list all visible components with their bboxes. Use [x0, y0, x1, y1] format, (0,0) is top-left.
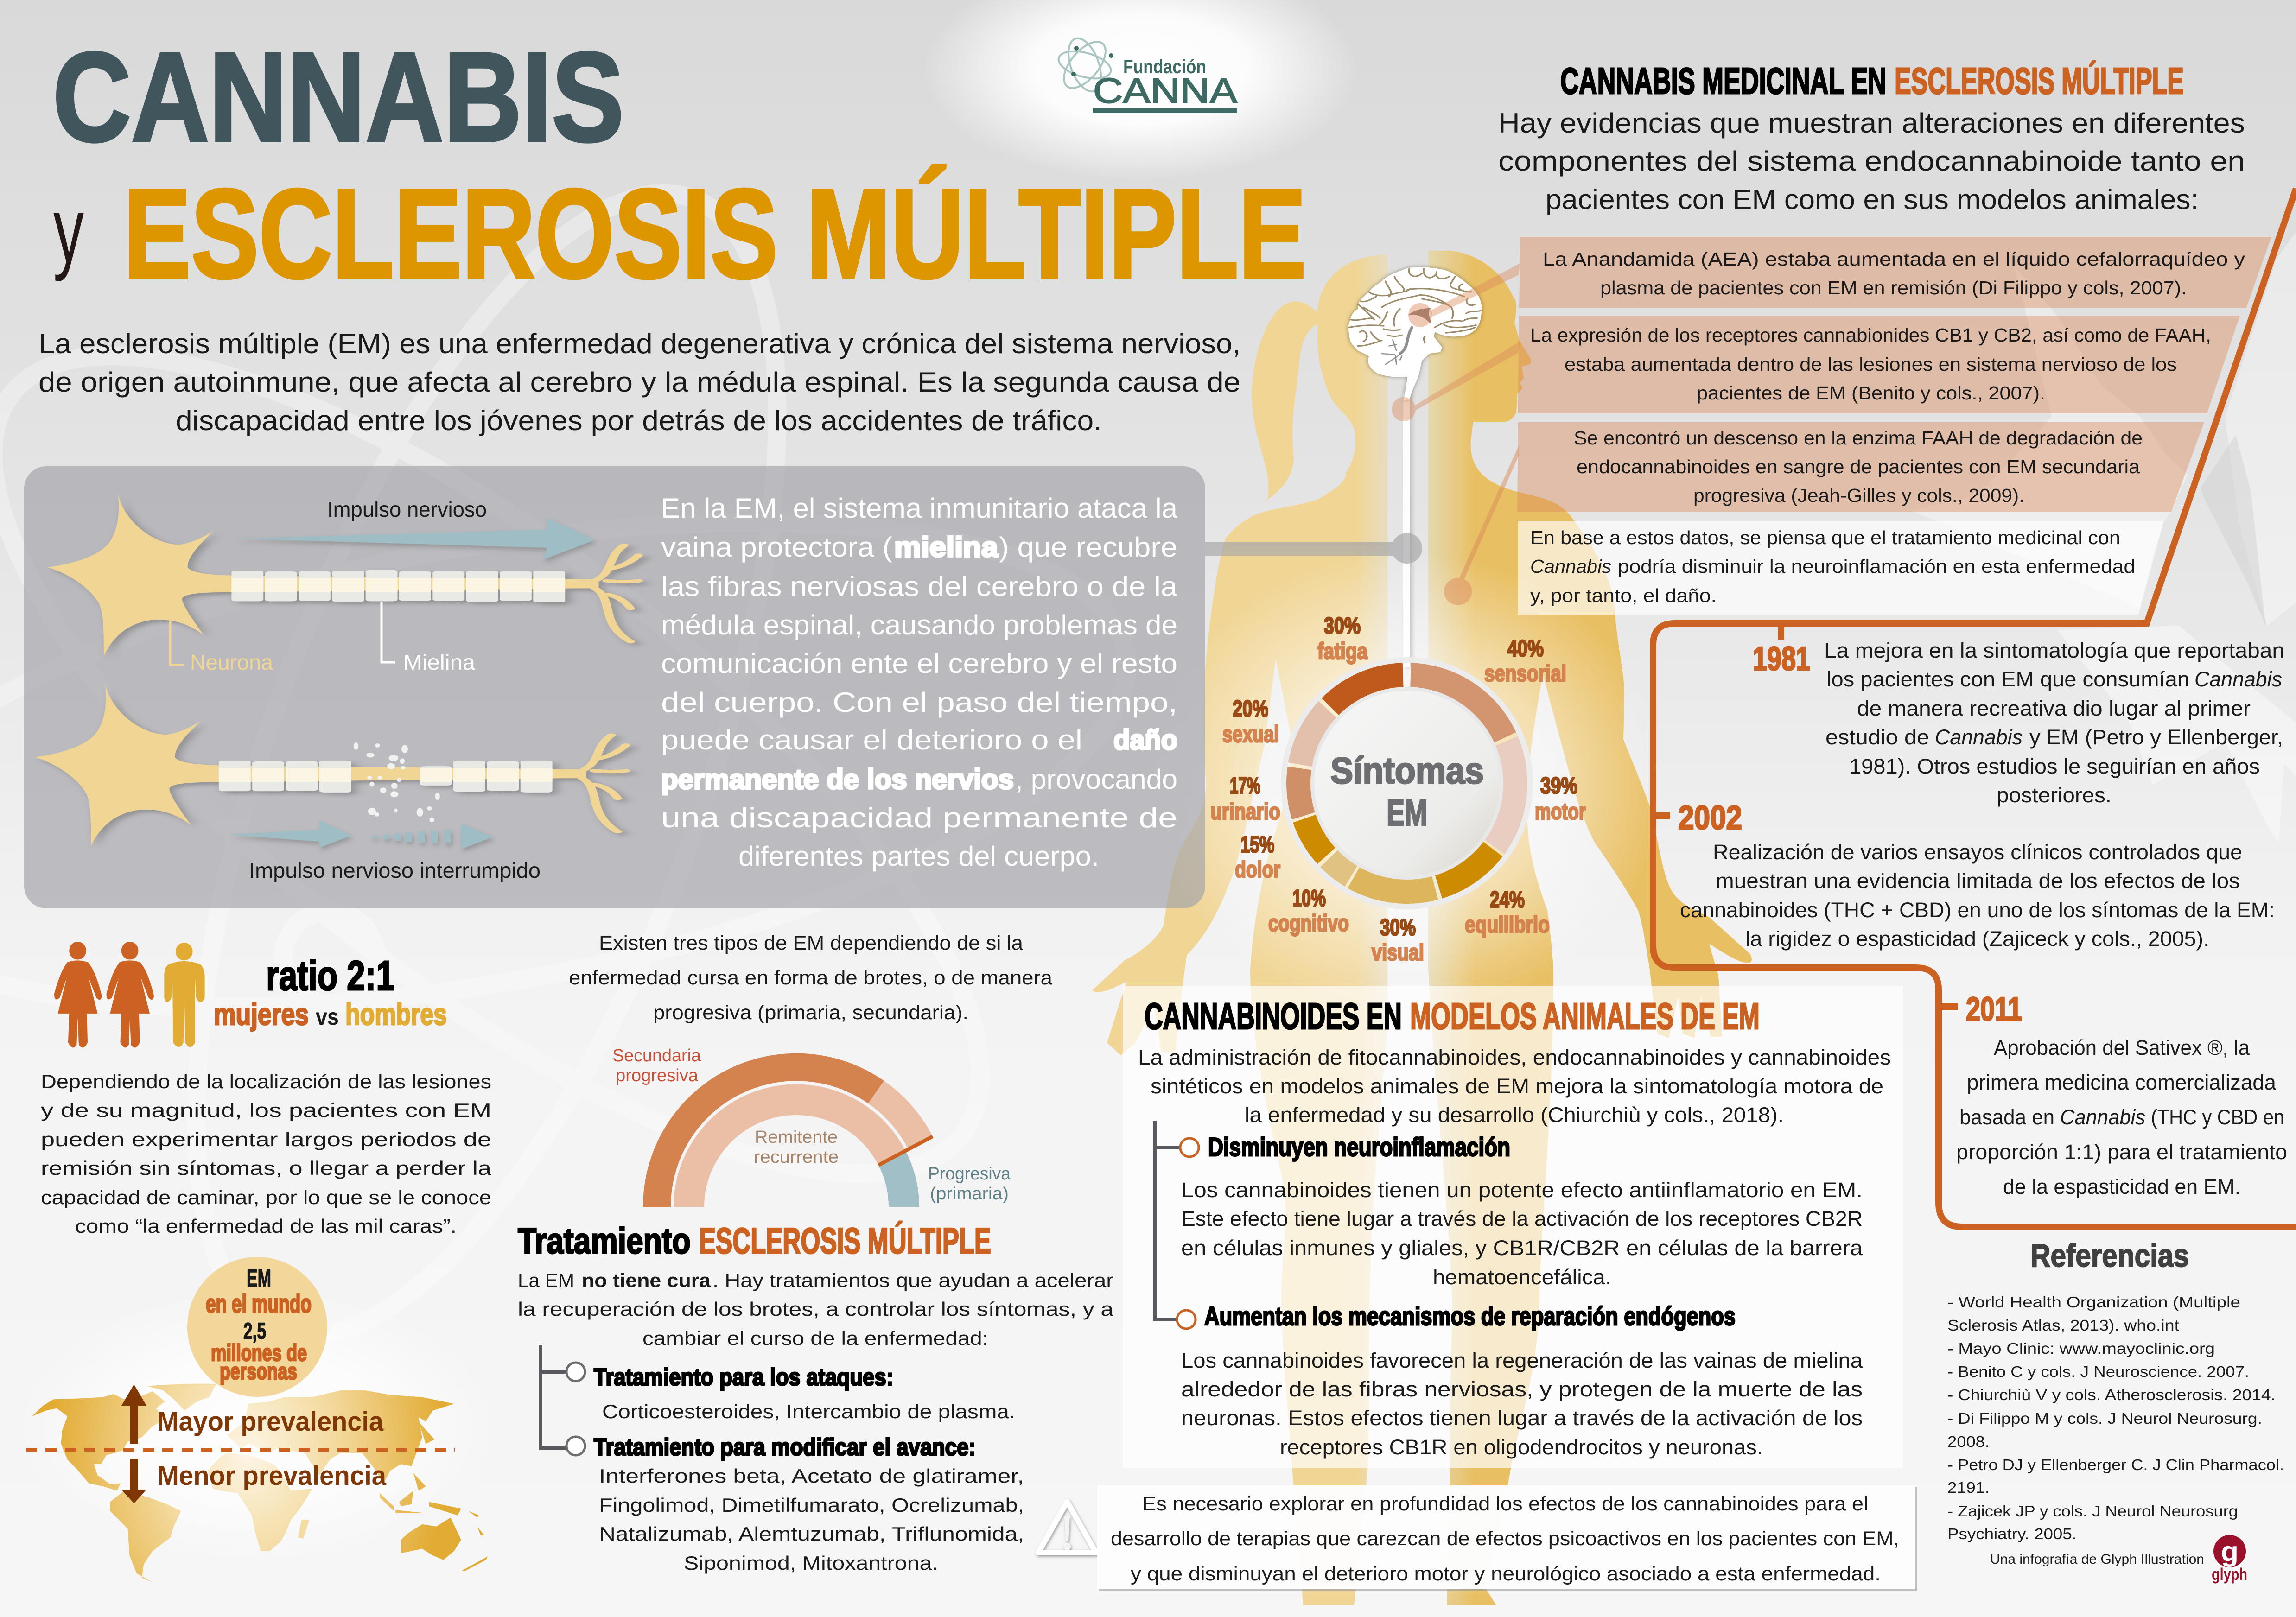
- text: evidence intro: componentes del sistema endocannabinoide tanto en: [1498, 146, 2245, 177]
- text: treatment intro: . Hay tratamientos que ayudan a acelerar: [712, 1269, 1113, 1291]
- logo: Fundación CANNA: [1056, 34, 1237, 113]
- chart: MS types arcs: Secundaria: [612, 1046, 701, 1065]
- callout: further research: y que disminuyan el deterioro motor y neurológico asociado a esta enfermedad.: [1131, 1563, 1881, 1585]
- panel: gray myelin explanation: [24, 466, 1422, 908]
- timeline: 2002: muestran una evidencia limitada de los efectos de los: [1716, 869, 2240, 893]
- circle: EM en el mundo: EM: [247, 1264, 271, 1292]
- heading: ratio 2:1: vs: [316, 1004, 339, 1030]
- text: myelin explanation: puede causar el deterioro o el: [661, 724, 1082, 755]
- heading: ratio 2:1: mujeres: [214, 997, 309, 1031]
- animal models list: neuronas. Estos efectos tienen lugar a través de la activación de los: [1181, 1406, 1863, 1430]
- text: relapses: como “la enfermedad de las mil caras”.: [75, 1215, 457, 1237]
- label: neurona: Neurona: [190, 650, 273, 674]
- credit: Glyph Illustration: glyph: [2212, 1565, 2247, 1584]
- symptom labels: 15%: [1240, 831, 1274, 857]
- title: ESCLEROSIS MÚLTIPLE: [123, 163, 1306, 305]
- text: references: - Petro DJ y Ellenberger C. J Clin Pharmacol.: [1947, 1456, 2284, 1473]
- symptom labels: fatiga: [1317, 638, 1368, 664]
- credit: Glyph Illustration: Una infografía de Glyph Illustration: [1990, 1552, 2204, 1567]
- circle: EM en el mundo: 2,5: [243, 1318, 266, 1344]
- symptom labels: 40%: [1507, 635, 1544, 661]
- label: impulso interrumpido: Impulso nervioso interrumpido: [249, 858, 541, 882]
- map glow: [16, 1288, 498, 1566]
- timeline: 1981: Cannabis: [1935, 725, 2023, 749]
- spinal cord: [1403, 394, 1410, 667]
- text: treatment intro: cambiar el curso de la enfermedad:: [642, 1327, 988, 1349]
- text: types of MS: enfermedad cursa en forma de brotes, o de manera: [569, 967, 1052, 989]
- arrow: nerve impulse: [231, 518, 595, 560]
- text: evidence intro: Hay evidencias que muestran alteraciones en diferentes: [1498, 108, 2245, 139]
- treatment list: [541, 1345, 1024, 1574]
- text: relapses: y de su magnitud, los pacientes con EM: [41, 1099, 491, 1121]
- timeline: 1981: y EM (Petro y Ellenberger,: [2029, 725, 2283, 749]
- animal models list: [1155, 1121, 1863, 1459]
- symptom labels: cognitivo: [1268, 910, 1349, 936]
- heading: animal models: CANNABINOIDES EN: [1145, 996, 1402, 1037]
- text: animal models intro: la enfermedad y su desarrollo (Chiurchiù y cols., 2018).: [1245, 1103, 1784, 1127]
- timeline: 2011: Aprobación del Sativex ®, la: [1994, 1036, 2250, 1059]
- text: myelin explanation: ) que recubre: [999, 532, 1177, 563]
- chart: MS types arcs: Progresiva: [928, 1164, 1011, 1184]
- heading: references: Referencias: [2030, 1237, 2189, 1274]
- text: references: 2008.: [1947, 1433, 1990, 1450]
- credit: Glyph Illustration: g: [2221, 1536, 2239, 1567]
- heading: animal models: [1145, 996, 1760, 1037]
- text: references: - Zajicek JP y cols. J Neurol Neurosurg: [1947, 1503, 2238, 1520]
- text: myelin explanation: , provocando: [1015, 764, 1177, 795]
- timeline: 2011: Cannabis: [2060, 1105, 2145, 1129]
- chart: MS types arcs: [612, 1046, 1011, 1207]
- text: references: 2191.: [1947, 1479, 1990, 1496]
- text: animal models intro: [1138, 1046, 1891, 1127]
- animal models list: Los cannabinoides tienen un potente efecto antiinflamatorio en EM.: [1181, 1178, 1863, 1202]
- brain: [1348, 267, 1482, 400]
- text: treatment intro: La EM: [518, 1269, 574, 1291]
- callout: further research: Es necesario explorar en profundidad los efectos de los cannabinoides para el: [1142, 1493, 1868, 1515]
- connector: abdomen marker to third panel: [1444, 445, 1519, 605]
- panel: evidence 1: plasma de pacientes con EM en remisión (Di Filippo y cols, 2007).: [1600, 277, 2187, 298]
- timeline: 2011: primera medicina comercializada: [1967, 1071, 2277, 1094]
- panel: conclusion: [1518, 521, 2164, 615]
- text: relapses: remisión sin síntomas, o llegar a perder la: [41, 1157, 492, 1179]
- symptom labels: 30%: [1324, 613, 1361, 639]
- text: relapses: Dependiendo de la localización de las lesiones: [41, 1071, 491, 1092]
- arrow: interrupted impulse: [228, 820, 493, 849]
- world map: [32, 1384, 488, 1582]
- chart: MS types arcs: progresiva: [616, 1066, 699, 1085]
- logo glow: [922, 0, 1358, 181]
- panel: evidence 3: [1517, 422, 2204, 512]
- timeline: 2002: cannabinoides (THC + CBD) en uno de los síntomas de la EM:: [1680, 898, 2275, 922]
- symptom labels: sensorial: [1484, 660, 1566, 686]
- animal models list: Disminuyen neuroinflamación: [1208, 1132, 1510, 1161]
- symptom labels: 10%: [1292, 885, 1326, 911]
- text: myelin explanation: daño: [1113, 724, 1177, 755]
- timeline: 1981: Cannabis: [2194, 667, 2282, 691]
- text: types of MS: [569, 932, 1052, 1024]
- timeline: 2011: de la espasticidad en EM.: [2003, 1175, 2240, 1198]
- chart: MS types arcs: Remitente: [755, 1128, 838, 1147]
- body silhouette: [1092, 251, 1752, 1605]
- text: myelin explanation: médula espinal, causando problemas de: [661, 609, 1177, 640]
- label: neurona: [170, 620, 273, 674]
- text: treatment intro: no tiene cura: [582, 1269, 711, 1291]
- panel: evidence 2: estaba aumentada dentro de las lesiones en sistema nervioso de los: [1565, 354, 2177, 375]
- timeline: 1981: La mejora en la sintomatología que reportaban: [1824, 639, 2284, 662]
- treatment list: Natalizumab, Alemtuzumab, Triflunomida,: [599, 1523, 1024, 1545]
- figure: [1092, 251, 1752, 1605]
- symptom labels: 20%: [1233, 696, 1268, 722]
- label: impulso nervioso: Impulso nervioso: [327, 497, 487, 521]
- arrow: up: [121, 1384, 146, 1444]
- symptom labels: 24%: [1490, 887, 1525, 913]
- panel: evidence 2: La expresión de los receptores cannabionides CB1 y CB2, así como de FAAH,: [1530, 324, 2211, 346]
- panel: evidence 2: pacientes de EM (Benito y cols., 2007).: [1697, 382, 2045, 404]
- label: menor: Menor prevalencia: [157, 1461, 387, 1491]
- treatment list: Corticoesteroides, Intercambio de plasma.: [602, 1401, 1015, 1422]
- circle: EM en el mundo: [187, 1257, 327, 1397]
- animal models list: Los cannabinoides favorecen la regeneración de las vainas de mielina: [1181, 1349, 1863, 1372]
- heading: ratio 2:1: [214, 953, 447, 1031]
- connector: brain to first panel: [1429, 263, 1520, 317]
- symptom labels: dolor: [1235, 856, 1280, 882]
- title: y: [53, 178, 84, 282]
- timeline: 2011: proporción 1:1) para el tratamiento: [1956, 1140, 2287, 1164]
- symptom labels: [1210, 613, 1586, 965]
- panel: evidence 3: endocannabinoides en sangre de pacientes con EM secundaria: [1577, 456, 2140, 477]
- timeline: 1981: posteriores.: [1997, 783, 2112, 807]
- panel: conclusion: y, por tanto, el daño.: [1530, 585, 1717, 606]
- treatment list: Tratamiento para los ataques:: [594, 1364, 893, 1391]
- arrow: down: [121, 1459, 146, 1503]
- label: mayor: Mayor prevalencia: [157, 1407, 384, 1437]
- panel: evidence 3: Se encontró un descenso en la enzima FAAH de degradación de: [1574, 427, 2143, 449]
- chart: MS types arcs: (primaria): [930, 1184, 1009, 1204]
- diagram: damaged neuron: [35, 679, 626, 846]
- chart: MS types arcs: recurrente: [754, 1148, 839, 1167]
- treatment list: Fingolimod, Dimetilfumarato, Ocrelizumab,: [599, 1494, 1024, 1516]
- chart: symptoms ring: EM: [1387, 792, 1427, 833]
- text: references: Psychiatry. 2005.: [1947, 1525, 2077, 1542]
- decorative atom orbits: [0, 124, 1164, 1405]
- text: references: [1947, 1294, 2284, 1542]
- diagram: healthy neuron: [48, 489, 639, 656]
- heading: animal models: MODELOS ANIMALES DE EM: [1410, 996, 1760, 1037]
- text: references: - Benito C y cols. J Neuroscience. 2007.: [1947, 1363, 2249, 1380]
- text: myelin explanation: las fibras nerviosas del cerebro o de la: [661, 571, 1178, 602]
- text: introduction: discapacidad entre los jóvenes por detrás de los accidentes de tráfico.: [176, 405, 1102, 436]
- text: types of MS: Existen tres tipos de EM dependiendo de si la: [599, 932, 1023, 954]
- faded hand shape on the right: [1911, 232, 2296, 843]
- text: references: - World Health Organization (Multiple: [1947, 1294, 2240, 1311]
- title: [53, 26, 1306, 305]
- symptom labels: 17%: [1230, 773, 1260, 799]
- panel: conclusion: En base a estos datos, se piensa que el tratamiento medicinal con: [1530, 527, 2120, 548]
- circle: EM en el mundo: en el mundo: [206, 1289, 312, 1318]
- heading: treatment: ESCLEROSIS MÚLTIPLE: [699, 1220, 991, 1261]
- text: references: - Chiurchiù V y cols. Atherosclerosis. 2014.: [1947, 1386, 2276, 1403]
- text: treatment intro: [518, 1269, 1114, 1349]
- treatment list: Interferones beta, Acetato de glatiramer,: [599, 1465, 1024, 1487]
- text: myelin explanation: [661, 493, 1178, 872]
- callout: further research: [1097, 1485, 1917, 1591]
- text: myelin explanation: una discapacidad permanente de: [661, 802, 1177, 833]
- timeline: 2011: basada en: [1959, 1105, 2054, 1129]
- ring glow: [1147, 552, 1666, 1015]
- symptom labels: sexual: [1222, 721, 1279, 747]
- logo: Fundación CANNA: Fundación: [1123, 56, 1206, 77]
- timeline: 2002: 2002: [1678, 799, 1742, 837]
- heading: treatment: [518, 1220, 991, 1261]
- panel: evidence 1: La Anandamida (AEA) estaba aumentada en el líquido cefalorraquídeo y: [1543, 248, 2245, 270]
- text: myelin explanation: permanente de los nervios: [661, 764, 1014, 795]
- text: myelin explanation: En la EM, el sistema inmunitario ataca la: [661, 493, 1178, 524]
- text: introduction: de origen autoinmune, que afecta al cerebro y la médula espinal. Es la segunda causa de: [38, 367, 1240, 398]
- text: myelin explanation: vaina protectora (: [661, 532, 892, 563]
- circle: EM en el mundo: millones de: [211, 1340, 307, 1366]
- treatment list: Siponimod, Mitoxantrona.: [684, 1552, 938, 1574]
- text: introduction: [38, 328, 1240, 436]
- text: myelin explanation: comunicación ente el cerebro y el resto: [661, 648, 1177, 679]
- panel: evidence 2: [1518, 316, 2240, 413]
- ponytail: [1252, 301, 1318, 503]
- chart: symptoms ring: [1284, 660, 1530, 907]
- text: myelin explanation: del cuerpo. Con el paso del tiempo,: [661, 687, 1177, 718]
- text: references: - Di Filippo M y cols. J Neurol Neurosurg.: [1947, 1410, 2262, 1427]
- text: references: - Mayo Clinic: www.mayoclinic.org: [1947, 1340, 2215, 1357]
- text: relapses: pueden experimentar largos periodos de: [41, 1129, 491, 1150]
- text: evidence intro: [1498, 108, 2245, 215]
- panel: animal models: [1123, 986, 1903, 1468]
- symptom labels: motor: [1535, 799, 1586, 824]
- symptom labels: equilibrio: [1465, 912, 1550, 938]
- text: animal models intro: La administración de fitocannabinoides, endocannabinoides y cannabinoides: [1138, 1046, 1891, 1069]
- timeline: 1981: estudio de: [1825, 725, 1929, 749]
- symptom labels: 39%: [1540, 773, 1577, 799]
- text: myelin explanation: diferentes partes del cuerpo.: [738, 841, 1099, 872]
- prevalence divider: [26, 1384, 455, 1503]
- animal models list: en células inmunes y gliales, y CB1R/CB2R en células de la barrera: [1181, 1236, 1863, 1260]
- timeline: 2011: 2011: [1966, 991, 2022, 1028]
- credit: Glyph Illustration: [1990, 1535, 2247, 1584]
- callout: further research: desarrollo de terapias que carezcan de efectos psicoactivos en los pacientes con EM,: [1111, 1528, 1899, 1550]
- icons: two women and one man: [54, 942, 205, 1047]
- animal models list: hematoencefálica.: [1433, 1265, 1611, 1289]
- chart: symptoms ring: Síntomas: [1330, 750, 1484, 791]
- logo: Fundación CANNA: CANNA: [1093, 71, 1237, 111]
- timeline: 2002: la rigidez o espasticidad (Zajiceck y cols., 2005).: [1745, 927, 2209, 951]
- animal models list: alrededor de las fibras nerviosas, y protegen de la muerte de las: [1181, 1377, 1863, 1401]
- connector: spine to second panel: [1392, 341, 1520, 421]
- panel: evidence 1: [1519, 237, 2271, 308]
- timeline: 2011: [1956, 991, 2287, 1198]
- text: types of MS: progresiva (primaria, secundaria).: [653, 1002, 968, 1024]
- text: introduction: La esclerosis múltiple (EM) es una enfermedad degenerativa y crónica del sistema nervioso,: [38, 328, 1240, 359]
- timeline: 2002: [1678, 799, 2275, 951]
- text: animal models intro: sintéticos en modelos animales de EM mejora la sintomatología motora de: [1151, 1074, 1883, 1098]
- icon: warning triangle: [1038, 1502, 1096, 1553]
- text: evidence intro: pacientes con EM como en sus modelos animales:: [1546, 184, 2199, 215]
- symptom labels: 30%: [1380, 914, 1416, 940]
- panel: conclusion: Cannabis: [1530, 556, 1611, 577]
- treatment list: Tratamiento para modificar el avance:: [594, 1434, 976, 1461]
- text: treatment intro: la recuperación de los brotes, a controlar los síntomas, y a: [518, 1298, 1114, 1320]
- symptom labels: urinario: [1210, 799, 1280, 824]
- text: relapses: [41, 1071, 492, 1237]
- circle: EM en el mundo: personas: [220, 1358, 297, 1384]
- heading: ratio 2:1: ratio 2:1: [266, 953, 394, 999]
- timeline line: [1653, 189, 2296, 1227]
- timeline: 2002: Realización de varios ensayos clínicos controlados que: [1713, 840, 2242, 864]
- panel: conclusion: podría disminuir la neuroinflamación en esta enfermedad: [1618, 556, 2135, 577]
- animal models list: Este efecto tiene lugar a través de la activación de los receptores CB2R: [1181, 1207, 1863, 1230]
- animal models list: Aumentan los mecanismos de reparación endógenos: [1204, 1301, 1736, 1331]
- label: mielina: [382, 602, 475, 674]
- timeline: 1981: los pacientes con EM que consumían: [1826, 667, 2189, 691]
- timeline: 1981: 1981: [1753, 640, 1810, 678]
- symptom labels: visual: [1372, 939, 1424, 965]
- panel: evidence 3: progresiva (Jeah-Gilles y cols., 2009).: [1693, 485, 2024, 506]
- text: relapses: capacidad de caminar, por lo que se le conoce: [41, 1186, 491, 1208]
- text: myelin explanation: mielina: [894, 532, 999, 563]
- text: references: Sclerosis Atlas, 2013). who.int: [1947, 1317, 2179, 1334]
- title: CANNABIS: [53, 26, 624, 168]
- timeline: 2011: (THC y CBD en: [2151, 1105, 2284, 1129]
- animal models list: receptores CB1R en oligodendrocitos y neuronas.: [1280, 1435, 1763, 1459]
- timeline: 1981: 1981). Otros estudios le seguirían en años: [1849, 755, 2260, 778]
- heading: medicinal cannabis: CANNABIS MEDICINAL EN: [1560, 60, 1886, 101]
- connector: panel to spine: [1205, 533, 1422, 564]
- heading: treatment: Tratamiento: [518, 1220, 691, 1261]
- timeline: 1981: [1753, 639, 2284, 807]
- timeline: 1981: de manera recreativa dio lugar al primer: [1857, 697, 2251, 720]
- label: mielina: Mielina: [403, 650, 475, 674]
- heading: ratio 2:1: hombres: [345, 997, 447, 1031]
